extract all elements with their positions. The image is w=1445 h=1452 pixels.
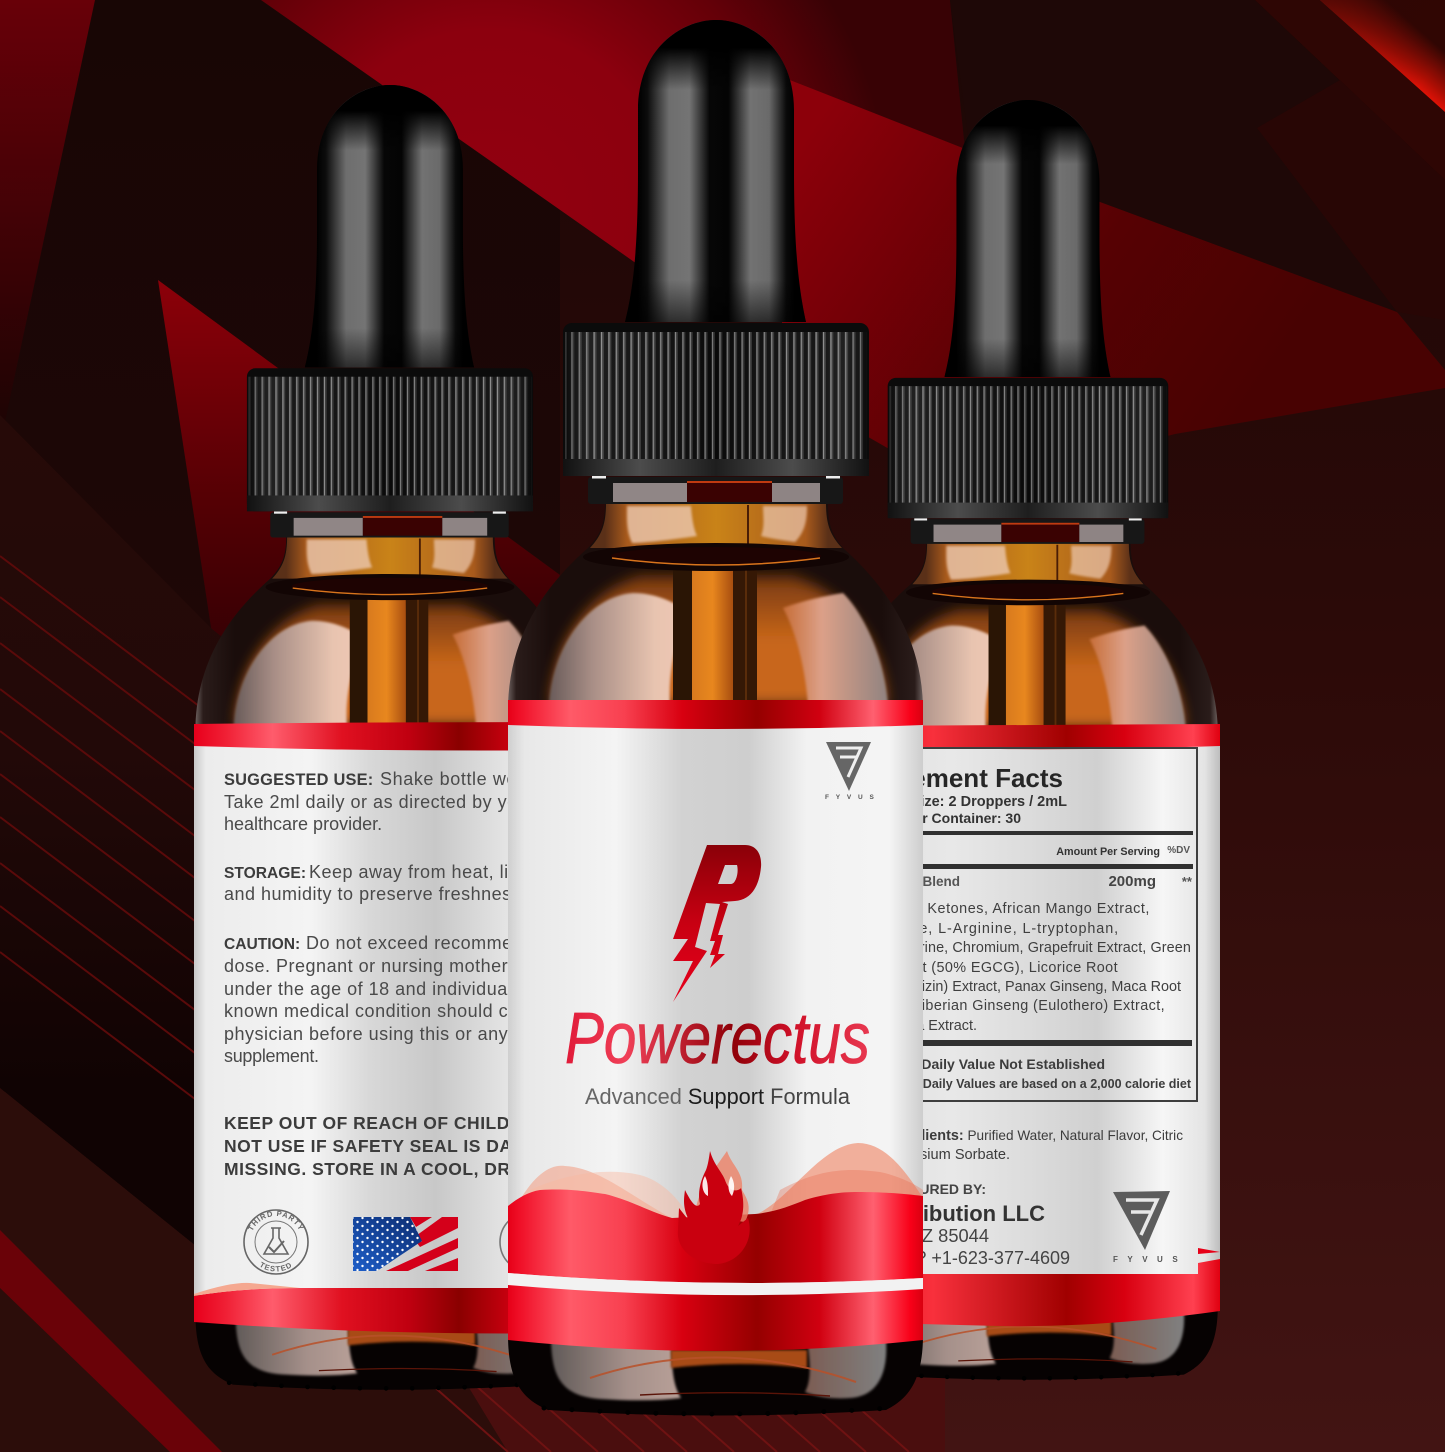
back label text: STORAGE: <box>224 865 306 882</box>
back label text: Take 2ml daily or as directed by your <box>224 792 535 812</box>
supplement facts panel: Serving Size: 2 Droppers / 2mL <box>853 794 1067 810</box>
supplement facts panel: Guarana Extract. <box>868 1018 977 1034</box>
supplement facts panel: ** Percent Daily Value Not Established <box>851 1056 1105 1072</box>
badge: third party tested: THIRD PARTY <box>248 1210 304 1230</box>
supplement facts panel: Caffeine, L-Arginine, L-tryptophan, <box>868 921 1119 937</box>
center bottle: front label <box>508 20 923 1416</box>
product name: Powerectus <box>565 999 870 1079</box>
back label text: healthcare provider. <box>224 814 382 834</box>
back label text: KEEP OUT OF REACH OF CHILDREN. DO <box>224 1113 586 1133</box>
tagline: Advanced Support Formula <box>585 1084 850 1109</box>
badge: third party tested <box>243 1209 309 1275</box>
back label text: Keep away from heat, light <box>309 862 535 882</box>
supplement facts panel: 200mg <box>1108 873 1156 890</box>
back label text <box>224 769 613 1179</box>
supplement facts panel: Extract, Siberian Ginseng (Eulothero) Extract, <box>855 998 1165 1014</box>
supplement facts panel: Questions? +1-623-377-4609 <box>835 1248 1070 1268</box>
supplement facts panel: (Glycyrrhizin) Extract, Panax Ginseng, Maca Root <box>863 979 1181 995</box>
waves and flame <box>508 1143 923 1283</box>
supplement facts panel: Amount Per Serving <box>1056 846 1160 858</box>
back label text: MISSING. STORE IN A COOL, DRY PLACE. <box>224 1159 594 1179</box>
supplement facts panel: Supplement Facts <box>839 763 1063 793</box>
back label text: SUGGESTED USE: <box>224 771 373 789</box>
supplement facts panel: Acid, Potassium Sorbate. <box>846 1147 1010 1163</box>
supplement facts panel: FYVUS Distribution LLC <box>793 1201 1045 1226</box>
back label text: supplement. <box>224 1046 319 1066</box>
back label text: physician before using this or any dietary <box>224 1024 571 1044</box>
back label text: NOT USE IF SAFETY SEAL IS DAMAGED OR <box>224 1136 613 1156</box>
supplement facts panel <box>793 748 1197 1268</box>
supplement facts panel: %DV <box>1167 845 1190 856</box>
icon: fyvus logo small <box>825 742 881 801</box>
supplement facts panel: MANUFACTURED BY: <box>841 1181 986 1197</box>
back label text: under the age of 18 and individuals with a <box>224 979 578 999</box>
icon: american flag <box>353 1217 458 1271</box>
supplement facts panel: Servings Per Container: 30 <box>842 810 1021 826</box>
back label text: CAUTION: <box>224 936 300 953</box>
supplement facts panel: Tea Extract (50% EGCG), Licorice Root <box>850 960 1118 976</box>
supplement facts panel: Other Ingredients: Purified Water, Natural Flavor, Citric <box>839 1128 1183 1144</box>
icon: P lightning logo <box>673 845 761 1002</box>
supplement facts panel: * Percent Daily Values are based on a 2,000 calorie diet <box>865 1077 1192 1091</box>
back label text: Do not exceed recommended <box>306 933 555 953</box>
supplement facts panel: Phoenix, AZ 85044 <box>834 1225 989 1246</box>
back label text: dose. Pregnant or nursing mothers, children <box>224 956 596 976</box>
supplement facts panel: Taurine, Chromium, Grapefruit Extract, Green <box>896 940 1191 956</box>
right bottle: supplement facts <box>793 100 1220 1380</box>
badge: third party tested: TESTED <box>260 1262 291 1272</box>
supplement facts panel: Proprietary Blend <box>847 874 960 889</box>
supplement facts panel: ** <box>1182 874 1193 889</box>
back label text: and humidity to preserve freshness. <box>224 884 527 904</box>
badge: partly hidden seal <box>500 1212 560 1272</box>
supplement facts panel: Raspberry Ketones, African Mango Extract, <box>851 901 1150 917</box>
left bottle: back label <box>194 85 632 1405</box>
back label text: known medical condition should consult a <box>224 1001 576 1021</box>
back label text: Shake bottle well. <box>380 769 532 789</box>
icon: fyvus logo: FYVUS <box>1113 1255 1187 1264</box>
icon: fyvus logo small: FYVUS <box>825 794 881 801</box>
icon: fyvus logo <box>1113 1191 1187 1264</box>
